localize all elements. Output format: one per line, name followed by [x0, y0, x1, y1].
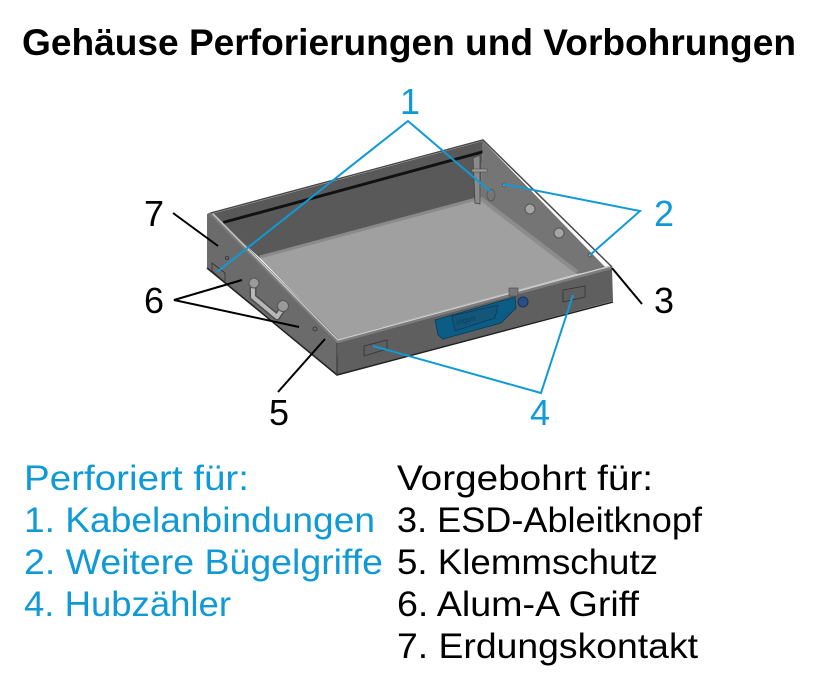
list: perforated for: 2. Weitere Bügelgriffe	[24, 543, 383, 582]
blue latch handle	[435, 288, 528, 339]
callout number 6: 6	[144, 280, 164, 321]
list: pre-drilled for: 5. Klemmschutz	[397, 543, 658, 582]
callout number 3: 3	[654, 280, 674, 321]
illustration: open enclosure tray	[207, 140, 613, 375]
list: pre-drilled for: 3. ESD-Ableitknopf	[397, 501, 702, 540]
list: pre-drilled for: 6. Alum-A Griff	[397, 585, 639, 624]
blue latch handle: ingun	[455, 313, 476, 327]
left panel perforation and holes	[212, 256, 317, 331]
list: pre-drilled for	[397, 459, 702, 666]
front panel	[337, 268, 613, 375]
tray floor	[260, 199, 577, 339]
list: pre-drilled for: 7. Erdungskontakt	[397, 627, 698, 666]
front panel perforations	[364, 286, 585, 356]
list: perforated for: 4. Hubzähler	[24, 585, 231, 624]
corner bracket	[472, 155, 495, 204]
black leader lines	[173, 213, 642, 392]
list: perforated for	[24, 459, 383, 624]
callout number 1: 1	[400, 81, 420, 122]
back wall dark stripe	[223, 150, 484, 224]
rim edges	[207, 140, 613, 375]
right inner wall	[480, 141, 606, 274]
list: pre-drilled for: Vorgebohrt für:	[397, 459, 653, 498]
callout number 4: 4	[530, 392, 550, 433]
metal handle	[249, 278, 288, 317]
callout number 2: 2	[654, 193, 674, 234]
title: Gehäuse Perforierungen und Vorbohrungen	[22, 22, 796, 63]
left side panel	[207, 212, 338, 375]
blue leader lines	[217, 121, 640, 393]
list: perforated for: 1. Kabelanbindungen	[24, 501, 375, 540]
back wall	[211, 141, 483, 258]
callout number 5: 5	[269, 392, 289, 433]
callout number 7: 7	[144, 193, 164, 234]
list: perforated for: Perforiert für:	[24, 459, 249, 498]
side wall nuts	[502, 183, 592, 257]
